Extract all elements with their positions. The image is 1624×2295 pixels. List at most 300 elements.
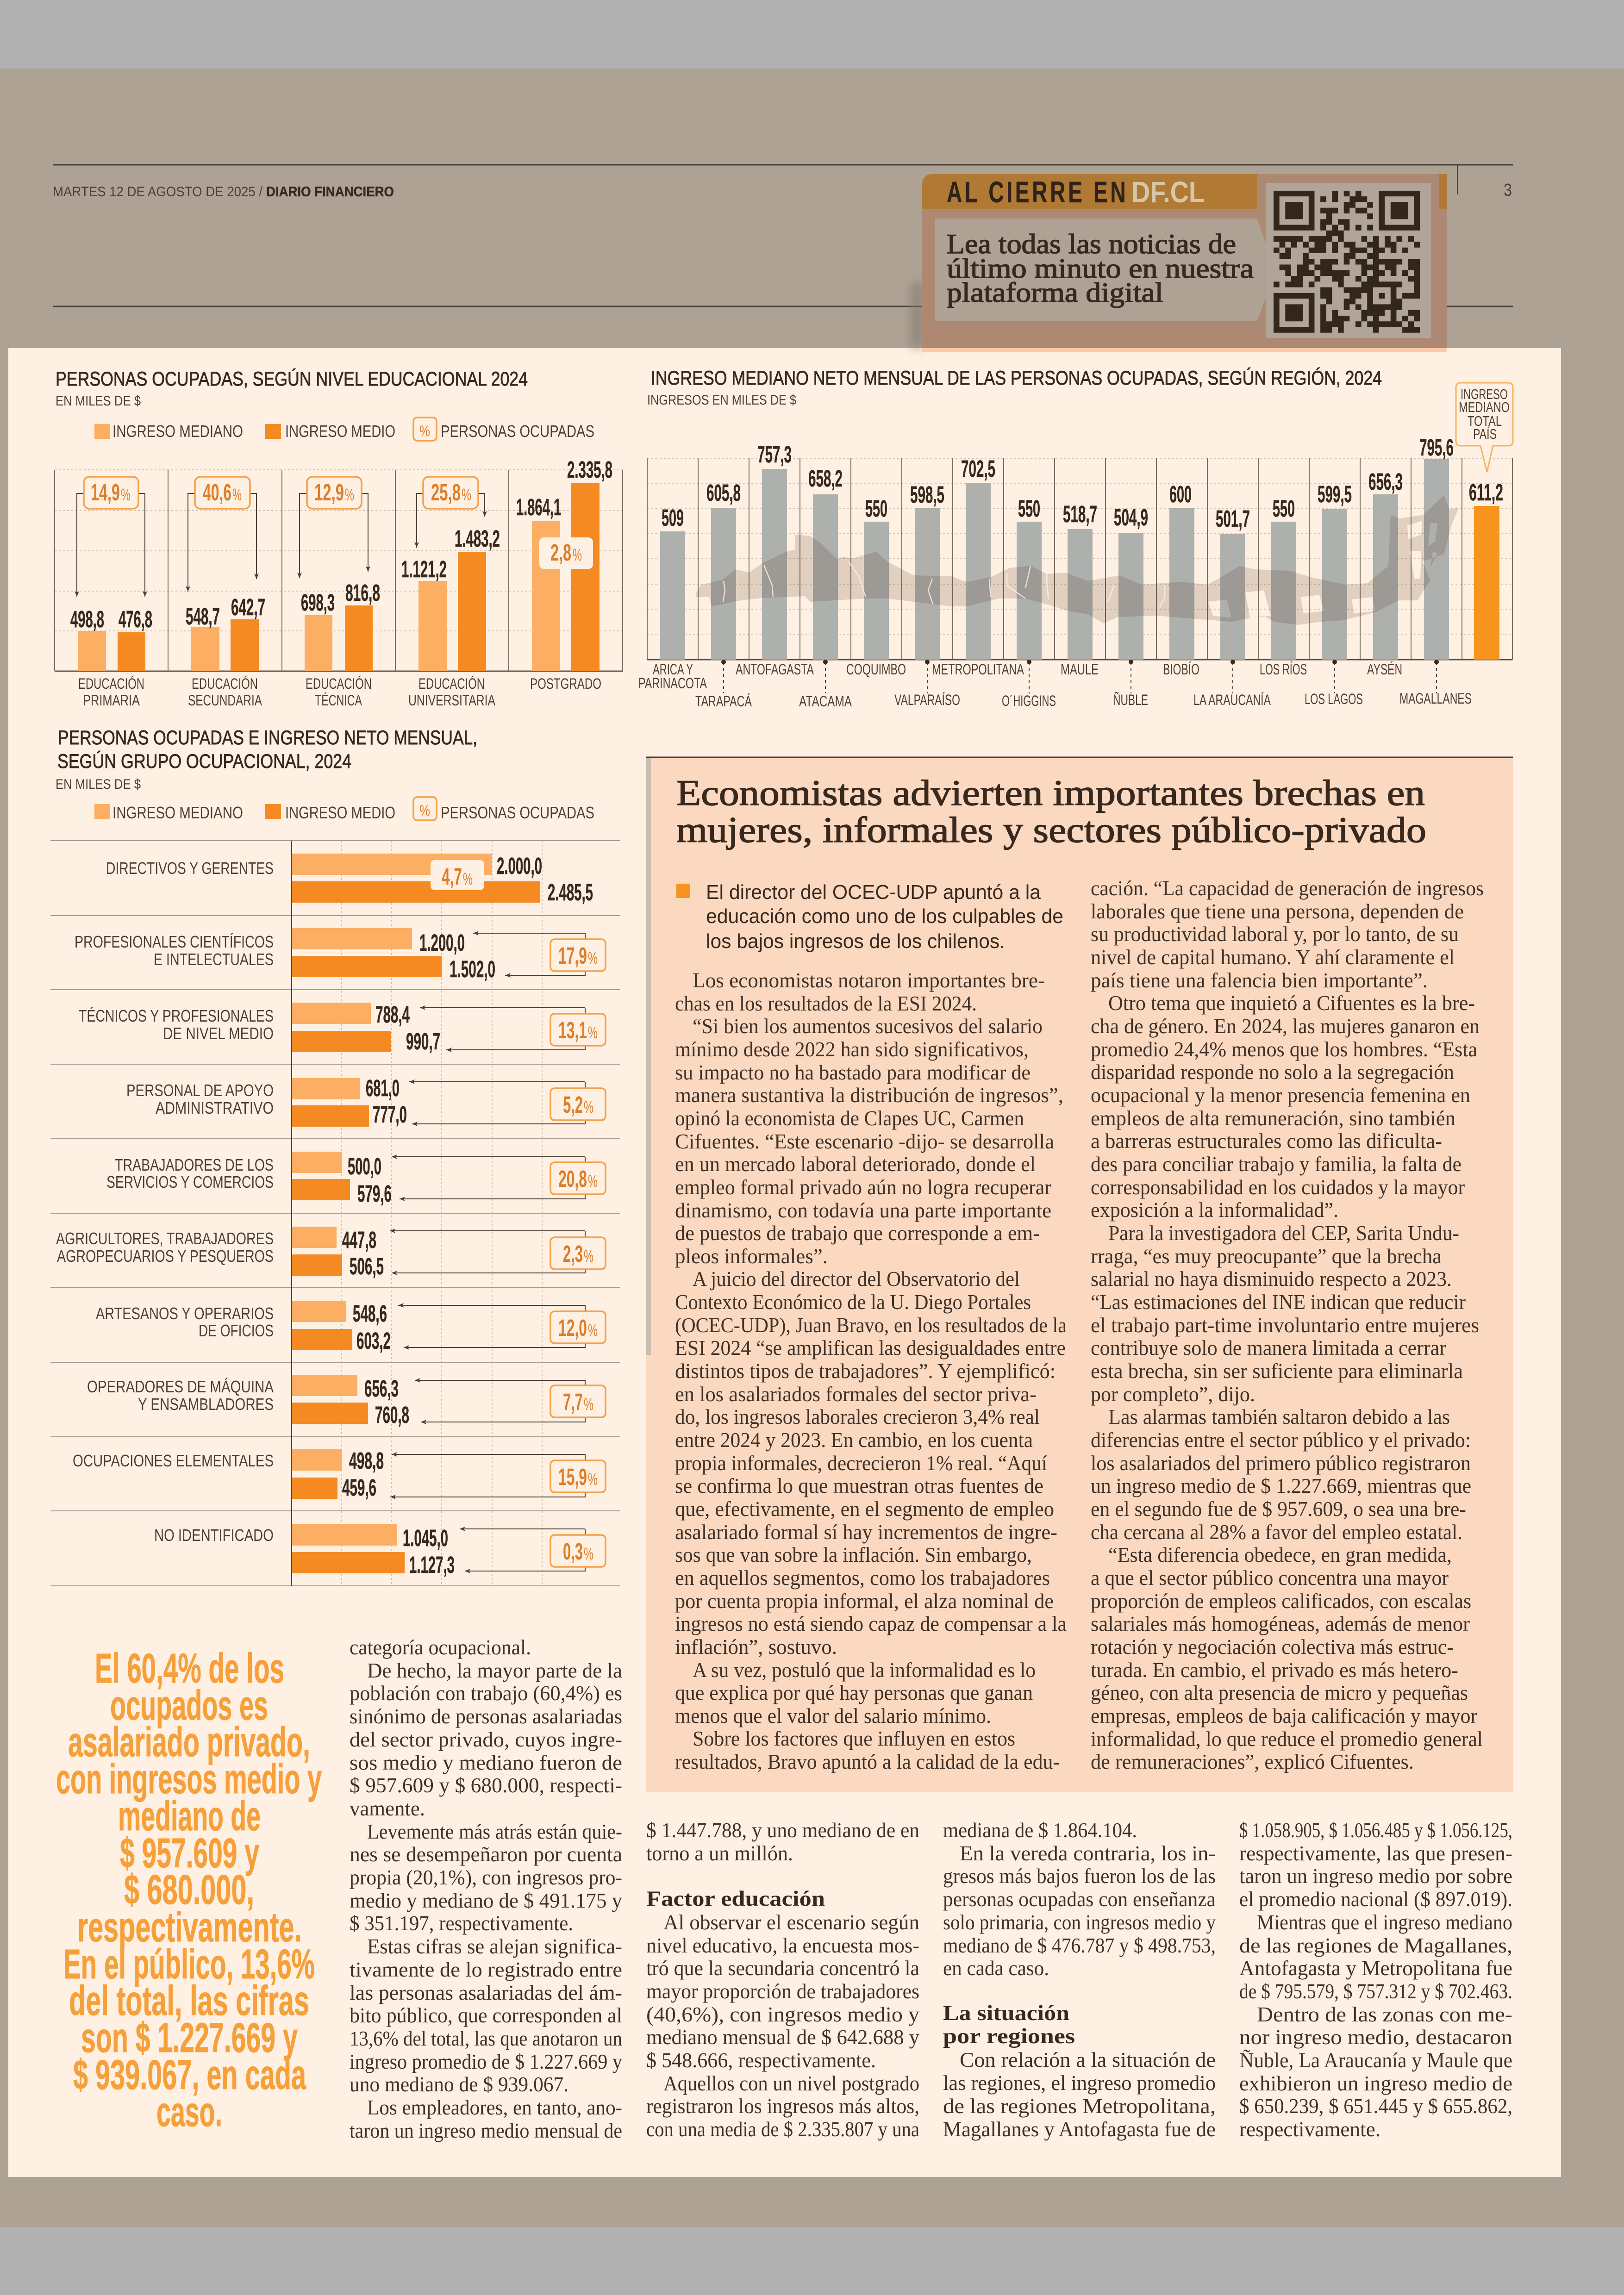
pull quote: $ 680.000,: [124, 1867, 254, 1913]
article continuation: left column: medio y mediano de $ 491.175 y: [350, 1889, 622, 1912]
percent box 12,9%: 12,9: [314, 479, 344, 505]
value labels: 656,3: [1368, 468, 1403, 495]
bars: educación técnica: [301, 580, 380, 709]
percent box 40,6%: [195, 477, 250, 509]
article continuation: bottom column 1: con una media de $ 2.335.807 y una: [646, 2117, 919, 2141]
arrows: percent to bars: [77, 493, 485, 597]
pull quote: En el público, 13,6%: [63, 1941, 315, 1988]
panel: main article: [646, 757, 1513, 1792]
row: técnicos y profesionales: 990,7: [406, 1028, 440, 1054]
row: personal de apoyo: PERSONAL DE APOYO: [126, 1081, 274, 1100]
region labels: AYSÉN: [1367, 661, 1402, 678]
row: no identificado: 1.127,3: [409, 1552, 455, 1578]
article text: column A: su impacto no ha bastado para modificar de: [675, 1060, 1031, 1084]
percent box 14,9%: [84, 477, 138, 509]
value labels: 795,6: [1419, 434, 1454, 461]
pull quote: El 60,4% de los: [95, 1646, 284, 1692]
region labels: O´HIGGINS: [1002, 692, 1056, 709]
article text: column B: a barreras estructurales como las dificulta-: [1091, 1129, 1442, 1153]
bars: educación secundaria: EDUCACIÓN: [192, 675, 258, 692]
grid: [55, 470, 623, 671]
row: operadores de máquina: Y ENSAMBLADORES: [138, 1395, 274, 1414]
article continuation: left column: $ 351.197, respectivamente.: [350, 1911, 573, 1935]
article text: column A: distintos tipos de trabajadores”. Y ejemplificó:: [675, 1359, 1056, 1383]
bars: postgrado: 1.864,1: [516, 494, 561, 520]
row: no identificado: NO IDENTIFICADO: [154, 1526, 274, 1545]
article continuation: left column: ingreso promedio de $ 1.227.669 y: [350, 2050, 622, 2073]
article continuation: left column: bito público, que corresponden al: [350, 2003, 622, 2027]
article text: column A: sos que van sobre la inflación. Sin embargo,: [675, 1543, 1032, 1566]
article text: column B: informalidad, lo que reduce el promedio general: [1091, 1727, 1483, 1751]
pull quote: con ingresos medio y: [56, 1756, 322, 1802]
article continuation: left column: población con trabajo (60,4%) es: [350, 1681, 622, 1705]
percent box 14,9%: %: [121, 485, 131, 504]
value labels: 611,2: [1469, 479, 1503, 505]
promo brand: DF.CL: [1131, 175, 1205, 209]
article continuation: bottom column 1: torno a un millón.: [646, 1841, 793, 1865]
region labels: LA ARAUCANÍA: [1193, 692, 1271, 708]
article deck: El director del OCEC-UDP apuntó a la: [706, 881, 1041, 904]
legend: PERSONAS OCUPADAS: [441, 803, 594, 822]
article continuation: left column: uno mediano de $ 939.067.: [350, 2072, 568, 2096]
article continuation: bottom column 2: Con relación a la situación de: [960, 2048, 1216, 2071]
pull quote: [56, 1646, 322, 2135]
value labels: 757,3: [757, 441, 792, 468]
article text: column A: que explica por qué hay personas que ganan: [675, 1681, 1033, 1704]
article continuation: bottom column 3: el promedio nacional ($ 897.019).: [1239, 1887, 1512, 1911]
article text: column A: Sobre los factores que influyen en estos: [693, 1727, 1015, 1750]
callout: ingreso mediano total país: INGRESO: [1461, 386, 1508, 402]
icon: orange bullet: [676, 884, 690, 898]
bars: postgrado: [516, 456, 612, 692]
bars: postgrado: 2.335,8: [567, 456, 612, 483]
article continuation: bottom column 3: respectivamente, las que presen-: [1239, 1841, 1512, 1865]
promo heading: AL CIERRE EN: [947, 176, 1126, 209]
pull quote: ocupados es: [110, 1683, 268, 1729]
region labels: LOS LAGOS: [1305, 691, 1363, 707]
row: directivos y gerentes: DIRECTIVOS Y GERENTES: [106, 859, 274, 878]
row: directivos y gerentes: 2.485,5: [548, 879, 593, 905]
article text: column A: menos que el valor del salario mínimo.: [675, 1704, 991, 1727]
row: profesionales científicos: 17,9: [558, 942, 587, 969]
article continuation: bottom column 2: [943, 1818, 1216, 2141]
row: ocupaciones elementales: 459,6: [342, 1474, 376, 1501]
article continuation: bottom column 2: en cada caso.: [943, 1956, 1049, 1980]
article text: column B: cha cercana al 28% a favor del empleo estatal.: [1091, 1520, 1462, 1544]
row: ocupaciones elementales: [73, 1447, 606, 1501]
article text: column B: Para la investigadora del CEP, Sarita Undu-: [1108, 1221, 1459, 1245]
page header: [53, 165, 1513, 306]
article continuation: bottom column 3: respectivamente.: [1239, 2117, 1380, 2141]
bars: educación secundaria: [186, 594, 265, 709]
newspaper name: DIARIO FINANCIERO: [266, 184, 394, 200]
row: no identificado: 0,3: [563, 1538, 583, 1565]
article continuation: bottom column 3: taron un ingreso medio por sobre: [1239, 1864, 1512, 1888]
row: artesanos y operarios: DE OFICIOS: [199, 1321, 274, 1340]
percent box 14,9%: 14,9: [91, 479, 120, 505]
article continuation: left column: categoría ocupacional.: [350, 1635, 531, 1659]
row: no identificado: %: [584, 1544, 593, 1563]
pull quote: $ 939.067, en cada: [73, 2052, 306, 2098]
row: agricultores: 447,8: [342, 1227, 376, 1253]
chart unit: EN MILES DE $: [56, 777, 141, 792]
bars: educación primaria: EDUCACIÓN: [78, 675, 144, 692]
article text: column B: empleos de alta remuneración, sino también: [1091, 1106, 1455, 1130]
article text: column B: por completo”, dijo.: [1091, 1382, 1255, 1406]
legend: %: [419, 423, 430, 439]
value labels: [662, 434, 1503, 532]
article text: column A: dinamismo, con todavía una parte importante: [675, 1198, 1051, 1222]
chart unit: INGRESOS EN MILES DE $: [647, 393, 796, 408]
article text: column B: los asalariados del primero público registraron: [1091, 1451, 1471, 1475]
row: operadores de máquina: 656,3: [364, 1375, 399, 1402]
bars: educación universitaria: 1.483,2: [455, 525, 500, 552]
article text: column B: en el segundo fue de $ 957.609, o sea una bre-: [1091, 1497, 1466, 1521]
row: directivos y gerentes: [106, 853, 593, 905]
article continuation: left column: sos medio y mediano fueron de: [350, 1751, 622, 1774]
region labels: BIOBÍO: [1163, 661, 1199, 678]
row: trabajadores de los servicios: TRABAJADORES DE LOS: [115, 1155, 274, 1174]
map of Chile silhouette: [696, 495, 1459, 625]
chart title: PERSONAS OCUPADAS E INGRESO NETO MENSUAL,: [58, 727, 477, 749]
article continuation: bottom column 3: $ 1.058.905, $ 1.056.485 y $ 1.056.125,: [1239, 1818, 1512, 1842]
article continuation: left column: vamente.: [350, 1796, 425, 1820]
legend: [94, 797, 594, 822]
row: agricultores: AGROPECUARIOS Y PESQUEROS: [57, 1247, 274, 1266]
article text: column B: empresas, empleos de baja calificación y mayor: [1091, 1704, 1477, 1727]
article text: column A: do, los ingresos laborales crecieron 3,4% real: [675, 1405, 1040, 1428]
article continuation: bottom column 2: solo primaria, con ingresos medio y: [943, 1910, 1216, 1934]
value labels: 598,5: [910, 481, 944, 508]
pull quote: mediano de: [118, 1793, 261, 1840]
article text: column A: Contexto Económico de la U. Diego Portales: [675, 1290, 1031, 1314]
article text: column A: que, efectivamente, en el segmento de empleo: [675, 1497, 1054, 1521]
row: personal de apoyo: [126, 1075, 606, 1128]
legend: INGRESO MEDIANO: [112, 803, 243, 822]
region labels: TARAPACÁ: [695, 693, 752, 710]
row: artesanos y operarios: 603,2: [356, 1328, 391, 1354]
bars: educación secundaria: 642,7: [231, 594, 265, 620]
region labels: MAULE: [1061, 661, 1099, 678]
grid: [50, 841, 620, 1586]
article text: column B: rotación y negociación colectiva más estruc-: [1091, 1635, 1454, 1659]
article text: column A: mínimo desde 2022 han sido significativos,: [675, 1037, 1029, 1061]
row: personal de apoyo: ADMINISTRATIVO: [156, 1098, 274, 1117]
subheading: factor educación: Factor educación: [646, 1887, 825, 1911]
article text: column B: esta brecha, sin ser suficiente para eliminarla: [1091, 1359, 1463, 1383]
row: no identificado: [154, 1524, 606, 1578]
article text: column B: salarial no haya disminuido respecto a 2023.: [1091, 1267, 1452, 1291]
percent box 2,8%: %: [573, 545, 582, 564]
article continuation: bottom column 2: En la vereda contraria, los in-: [960, 1841, 1216, 1865]
article text: column B: ocupacional y la menor presencia femenina en: [1091, 1083, 1470, 1107]
article text: column B: país tiene una falencia bien importante”.: [1091, 968, 1428, 992]
row: ocupaciones elementales: 498,8: [349, 1447, 384, 1474]
row: técnicos y profesionales: %: [588, 1023, 598, 1042]
article text: column B: disparidad responde no solo a la segregación: [1091, 1060, 1454, 1084]
article continuation: bottom column 1: mayor proporción de trabajadores: [646, 1979, 919, 2003]
callout: ingreso mediano total país: [1456, 383, 1513, 472]
region labels: COQUIMBO: [846, 661, 906, 678]
bars: educación secundaria: SECUNDARIA: [188, 692, 262, 709]
article text: column B: un ingreso medio de $ 1.227.669, mientras que: [1091, 1474, 1471, 1497]
article text: column A: “Si bien los aumentos sucesivos del salario: [693, 1014, 1043, 1038]
value labels: 658,2: [808, 465, 843, 492]
page number: 3: [1504, 181, 1512, 200]
pull quote: son $ 1.227.669 y: [81, 2015, 298, 2061]
article text: column B: laborales que tiene una persona, dependen de: [1091, 899, 1464, 923]
article continuation: left column: 13,6% del total, las que anotaron un: [350, 2027, 622, 2050]
row: agricultores: AGRICULTORES, TRABAJADORES: [56, 1229, 274, 1248]
article continuation: bottom column 2: mediano de $ 476.787 y $ 498.753,: [943, 1933, 1216, 1957]
article continuation: left column: [350, 1635, 622, 2142]
article text: column A: opinó la economista de Clapes UC, Carmen: [675, 1106, 1024, 1130]
article text: column A: (OCEC-UDP), Juan Bravo, en los resultados de la: [675, 1313, 1067, 1337]
row: ocupaciones elementales: OCUPACIONES ELEMENTALES: [73, 1451, 274, 1470]
row: personal de apoyo: 681,0: [366, 1075, 400, 1101]
article text: column B: diferencias entre el sector público y el privado:: [1091, 1428, 1471, 1452]
row: agricultores: 506,5: [350, 1253, 384, 1279]
row: operadores de máquina: [87, 1375, 606, 1428]
region labels: METROPOLITANA: [932, 661, 1024, 678]
article deck: educación como uno de los culpables de: [706, 905, 1063, 928]
article continuation: left column: del sector privado, cuyos ingre-: [350, 1727, 622, 1751]
article continuation: bottom column 2: mediana de $ 1.864.104.: [943, 1818, 1137, 1842]
region labels: PARINACOTA: [638, 675, 707, 692]
chart: personas ocupadas según grupo ocupacional: [50, 727, 620, 1586]
article continuation: bottom column 3: nor ingreso medio, destacaron: [1239, 2025, 1512, 2049]
article continuation: bottom column 2: personas ocupadas con enseñanza: [943, 1887, 1216, 1911]
bars: educación primaria: PRIMARIA: [83, 692, 140, 709]
article continuation: bottom column 3: Ñuble, La Araucanía y Maule que: [1239, 2048, 1512, 2072]
article text: column A: asalariado formal sí hay incrementos de ingre-: [675, 1520, 1057, 1544]
row: personal de apoyo: %: [584, 1098, 593, 1116]
article continuation: left column: sinónimo de personas asalariadas: [350, 1704, 622, 1728]
date line: MARTES 12 DE AGOSTO DE 2025 /: [53, 184, 263, 200]
article text: column A: en los asalariados formales del sector priva-: [675, 1382, 1037, 1406]
article text: column A: pleos informales”.: [675, 1244, 828, 1268]
row: técnicos y profesionales: 788,4: [375, 1001, 410, 1028]
article text: column B: exposición a la informalidad”.: [1091, 1198, 1338, 1222]
chart: ingreso mediano según región: [638, 367, 1513, 710]
callout: ingreso mediano total país: PAÍS: [1473, 426, 1497, 442]
article continuation: bottom column 1: (40,6%), con ingresos medio y: [646, 2002, 919, 2026]
article text: column A: de puestos de trabajo que corresponde a em-: [675, 1221, 1040, 1245]
value labels: 550: [1273, 495, 1295, 522]
article continuation: bottom column 2: Magallanes y Antofagasta fue de: [943, 2117, 1216, 2141]
article text: column B: Las alarmas también saltaron debido a las: [1108, 1405, 1450, 1428]
value labels: 509: [662, 505, 684, 531]
chart unit: EN MILES DE $: [56, 393, 141, 409]
row: no identificado: 1.045,0: [403, 1525, 448, 1551]
article continuation: left column: Estas cifras se alejan significa-: [367, 1934, 622, 1958]
row: agricultores: [56, 1227, 606, 1279]
pull quote: respectivamente.: [77, 1904, 302, 1951]
value labels: 550: [865, 495, 887, 522]
promo text: [947, 229, 1254, 308]
row: artesanos y operarios: ARTESANOS Y OPERARIOS: [96, 1304, 274, 1323]
article continuation: bottom column 1: Al observar el escenario según: [663, 1910, 919, 1934]
percent box 25,8%: %: [462, 485, 471, 504]
article text: column B: proporción de empleos calificados, con escalas: [1091, 1589, 1471, 1613]
value labels: 605,8: [706, 480, 741, 506]
article text: column A: [675, 968, 1067, 1773]
article text: column B: cación. “La capacidad de generación de ingresos: [1091, 876, 1484, 900]
article text: column B: su productividad laboral y, por lo tanto, de su: [1091, 922, 1459, 946]
article continuation: bottom column 3: exhibieron un ingreso medio de: [1239, 2071, 1512, 2095]
pull quote: $ 957.609 y: [120, 1830, 259, 1877]
region labels: ARICA Y: [653, 661, 693, 678]
callout: ingreso mediano total país: TOTAL: [1468, 413, 1502, 429]
bars: educación primaria: 476,8: [119, 606, 152, 632]
article continuation: bottom column 1: [646, 1818, 919, 2141]
article text: column B: salariales más homogéneas, además de menor: [1091, 1612, 1470, 1635]
article continuation: bottom column 2: gresos más bajos fueron los de las: [943, 1864, 1216, 1888]
article continuation: left column: nes se desempeñaron por cuenta: [350, 1842, 622, 1866]
article headline: Economistas advierten importantes brechas en: [676, 773, 1425, 813]
grid: [647, 458, 1512, 660]
row: personal de apoyo: 5,2: [563, 1091, 583, 1118]
legend: INGRESO MEDIANO: [112, 422, 243, 441]
legend: [94, 418, 594, 441]
article text: column A: se confirma lo que muestran otras fuentes de: [675, 1474, 1043, 1497]
bars: educación técnica: TÉCNICA: [315, 692, 362, 709]
chart: personas ocupadas según nivel educacional: [55, 368, 623, 709]
pull quote: del total, las cifras: [69, 1978, 309, 2024]
bars: educación técnica: 698,3: [301, 589, 335, 616]
promo text: Lea todas las noticias de: [947, 229, 1236, 259]
row: operadores de máquina: OPERADORES DE MÁQUINA: [87, 1377, 274, 1396]
row: profesionales científicos: E INTELECTUALES: [154, 950, 274, 969]
row: trabajadores de los servicios: 20,8: [558, 1166, 587, 1192]
row: profesionales científicos: %: [588, 948, 598, 967]
percent box 25,8%: [423, 477, 478, 509]
row: agricultores: %: [584, 1247, 593, 1266]
row: artesanos y operarios: 548,6: [353, 1300, 387, 1327]
row: artesanos y operarios: [96, 1300, 606, 1354]
row: operadores de máquina: %: [584, 1395, 593, 1414]
chart title: PERSONAS OCUPADAS, SEGÚN NIVEL EDUCACIONAL 2024: [56, 368, 528, 390]
article text: column B: “Esta diferencia obedece, en gran medida,: [1108, 1543, 1452, 1566]
legend: INGRESO MEDIO: [285, 422, 395, 441]
article text: column A: Los economistas notaron importantes bre-: [693, 968, 1045, 992]
region labels: ANTOFAGASTA: [736, 661, 814, 678]
article text: column B: corresponsabilidad en los cuidados y la mayor: [1091, 1175, 1465, 1199]
row: profesionales científicos: [75, 928, 606, 982]
article text: column A: chas en los resultados de la ESI 2024.: [675, 992, 977, 1015]
region labels: [638, 661, 1472, 710]
row: profesionales científicos: 1.200,0: [419, 929, 465, 956]
row: técnicos y profesionales: 13,1: [558, 1017, 587, 1043]
row: trabajadores de los servicios: %: [588, 1172, 598, 1191]
row: personal de apoyo: 777,0: [373, 1101, 407, 1128]
bars: educación universitaria: EDUCACIÓN: [418, 675, 485, 692]
article continuation: bottom column 3: Mientras que el ingreso mediano: [1257, 1910, 1512, 1934]
percent box 25,8%: 25,8: [431, 479, 461, 505]
percent box 2,8%: [539, 537, 593, 569]
article continuation: bottom column 3: Dentro de las zonas con me-: [1257, 2002, 1512, 2026]
article text: column A: por cuenta propia informal, el alza nominal de: [675, 1589, 1054, 1613]
article continuation: left column: taron un ingreso medio mensual de: [350, 2119, 622, 2142]
article continuation: left column: propia (20,1%), con ingresos pro-: [350, 1865, 622, 1889]
article text: column A: ingresos no está siendo capaz de compensar a la: [675, 1612, 1067, 1635]
article continuation: bottom column 3: [1239, 1818, 1512, 2141]
article text: column A: empleo formal privado aún no logra recuperar: [675, 1175, 1051, 1199]
row: directivos y gerentes: 4,7: [442, 863, 462, 890]
value labels: 550: [1018, 495, 1040, 522]
bars: educación primaria: 498,8: [70, 606, 104, 632]
chart title: [57, 727, 477, 773]
article text: column B: [1091, 876, 1484, 1773]
article continuation: bottom column 3: de $ 795.579, $ 757.312 y $ 702.463.: [1239, 1979, 1512, 2003]
article deck: [706, 881, 1063, 953]
subheading: la situación por regiones: por regiones: [943, 2024, 1075, 2048]
row: ocupaciones elementales: %: [588, 1470, 598, 1489]
legend: %: [419, 802, 430, 819]
article text: column A: A juicio del director del Observatorio del: [693, 1267, 1020, 1291]
row: técnicos y profesionales: TÉCNICOS Y PROFESIONALES: [79, 1006, 274, 1025]
row: artesanos y operarios: 12,0: [558, 1315, 587, 1341]
article continuation: left column: las personas asalariadas del ám-: [350, 1981, 622, 2004]
callout: ingreso mediano total país: MEDIANO: [1459, 399, 1510, 415]
article text: column A: en aquellos segmentos, como los trabajadores: [675, 1566, 1050, 1590]
row: profesionales científicos: PROFESIONALES CIENTÍFICOS: [75, 932, 274, 951]
bars: educación universitaria: 1.121,2: [401, 556, 447, 582]
legend: PERSONAS OCUPADAS: [441, 422, 594, 441]
bars: educación universitaria: [401, 525, 500, 709]
row: directivos y gerentes: 2.000,0: [497, 853, 542, 879]
article continuation: bottom column 3: de las regiones de Magallanes,: [1239, 1933, 1512, 1957]
article text: column B: el trabajo part-time involuntario entre mujeres: [1091, 1313, 1479, 1337]
row: ocupaciones elementales: 15,9: [558, 1464, 587, 1490]
article text: column A: propia informales, decrecieron 1% real. “Aquí: [675, 1451, 1047, 1475]
article continuation: left column: $ 957.609 y $ 680.000, respecti-: [350, 1773, 622, 1797]
article continuation: bottom column 2: las regiones, el ingreso promedio: [943, 2071, 1216, 2095]
article text: column A: A su vez, postuló que la informalidad es lo: [693, 1658, 1036, 1682]
article text: column A: en un mercado laboral deteriorado, donde el: [675, 1152, 1036, 1176]
article text: column B: Otro tema que inquietó a Cifuentes es la bre-: [1108, 991, 1475, 1015]
value labels: 599,5: [1318, 481, 1352, 507]
bars: educación técnica: 816,8: [345, 580, 380, 606]
article continuation: bottom column 1: $ 1.447.788, y uno mediano de en: [646, 1818, 919, 1842]
article continuation: left column: De hecho, la mayor parte de la: [367, 1659, 622, 1682]
article continuation: bottom column 1: nivel educativo, la encuesta mos-: [646, 1933, 919, 1957]
article continuation: left column: Los empleadores, en tanto, ano-: [367, 2095, 622, 2119]
bar: total país: [1474, 506, 1499, 660]
bars by region: [660, 459, 1449, 660]
percent box 40,6%: %: [232, 485, 242, 504]
promo text: último minuto en nuestra: [947, 253, 1254, 284]
row: técnicos y profesionales: [79, 1001, 606, 1054]
bars: educación técnica: EDUCACIÓN: [306, 675, 372, 692]
article text: column B: “Las estimaciones del INE indican que reducir: [1091, 1290, 1466, 1314]
row: técnicos y profesionales: DE NIVEL MEDIO: [163, 1024, 274, 1043]
article text: column A: entre 2024 y 2023. En cambio, en los cuenta: [675, 1428, 1033, 1452]
icon: QR code: [1274, 191, 1420, 333]
percent box 12,9%: %: [345, 485, 354, 504]
value labels: 518,7: [1063, 501, 1097, 527]
row: trabajadores de los servicios: 579,6: [357, 1180, 392, 1207]
pull quote: asalariado privado,: [68, 1719, 310, 1765]
article text: column B: nivel de capital humano. Y ahí claramente el: [1091, 945, 1455, 969]
bars: educación primaria: [70, 606, 152, 709]
row: operadores de máquina: 760,8: [375, 1402, 409, 1428]
row: agricultores: 2,3: [563, 1241, 583, 1267]
row: trabajadores de los servicios: 500,0: [348, 1153, 381, 1179]
bars: educación universitaria: UNIVERSITARIA: [408, 692, 496, 709]
region labels: VALPARAÍSO: [894, 692, 960, 708]
article text: column B: géneo, con alta presencia de micro y pequeñas: [1091, 1681, 1468, 1704]
